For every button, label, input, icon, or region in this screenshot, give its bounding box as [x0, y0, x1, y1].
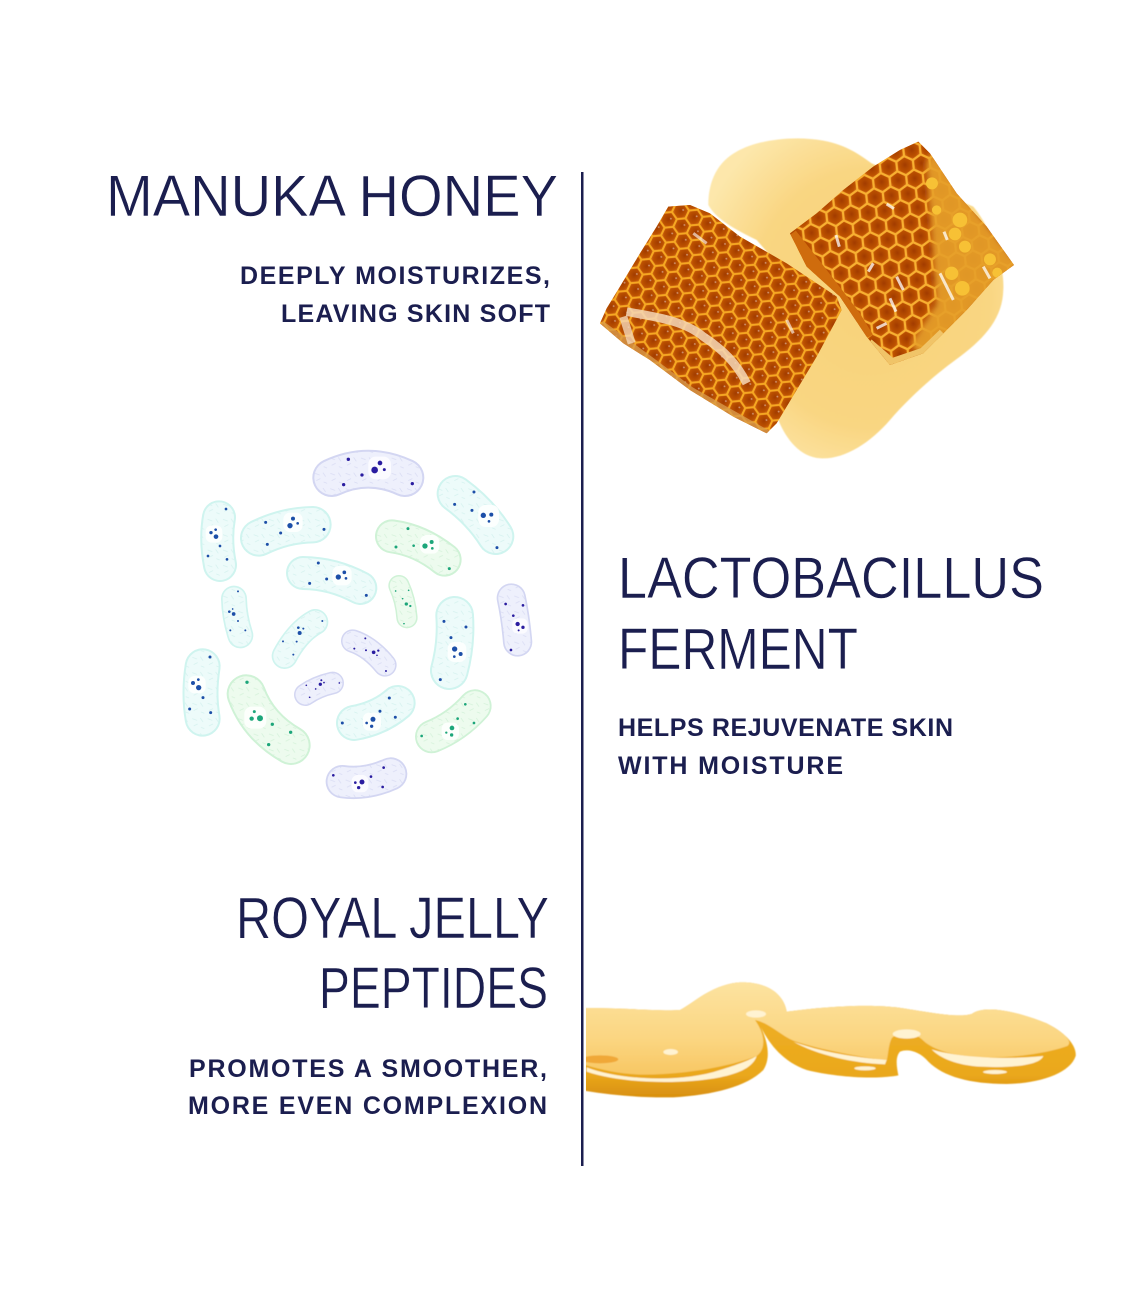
puddle upper surface [580, 982, 1069, 1075]
left honeycomb [600, 205, 842, 434]
description: manuka honey [240, 262, 550, 328]
illustration: honeycomb pieces on honey [590, 130, 1023, 458]
heading: lactobacillus ferment [618, 546, 1044, 682]
description: royal jelly peptides: MORE EVEN COMPLEXION [188, 1092, 547, 1120]
description: royal jelly peptides: PROMOTES A SMOOTHER, [189, 1055, 547, 1083]
bacterium teal right [439, 615, 467, 681]
heading: royal jelly peptides: ROYAL JELLY [236, 886, 549, 951]
puddle body [580, 982, 1076, 1097]
heading: lactobacillus ferment: FERMENT [618, 617, 858, 682]
bacterium teal upper [259, 513, 325, 546]
right honeycomb [790, 142, 1014, 365]
bacterium lavender top [332, 457, 414, 486]
heading: lactobacillus ferment: LACTOBACILLUS [618, 546, 1044, 611]
heading: royal jelly peptides [236, 886, 549, 1021]
bacterium teal lower centre [341, 696, 398, 731]
bacterium lavender right [504, 598, 528, 651]
panel: lactobacillus ferment text [618, 546, 1044, 780]
bacterium green upper right [392, 527, 451, 570]
bacterium green small [395, 586, 411, 624]
puddle rim [580, 982, 1076, 1097]
bacterium teal inner left [282, 620, 323, 656]
bacterium lavender bottom [332, 766, 391, 792]
panel: royal jelly peptides text [188, 886, 549, 1120]
honey pool [708, 138, 1003, 458]
bacterium teal left upper [206, 508, 228, 565]
centre divider line [581, 172, 584, 1166]
description: lactobacillus ferment [618, 714, 953, 780]
illustration: lactobacillus bacteria cluster [188, 457, 528, 792]
heading: manuka honey: MANUKA HONEY [106, 164, 558, 229]
description: manuka honey: DEEPLY MOISTURIZES, [240, 262, 550, 290]
description: manuka honey: LEAVING SKIN SOFT [281, 300, 550, 328]
bacterium teal small left [228, 590, 246, 635]
bacterium lavender inner [353, 637, 387, 672]
heading: royal jelly peptides: PEPTIDES [319, 956, 548, 1021]
puddle orange stain [582, 1055, 618, 1063]
puddle highlights [587, 1010, 1043, 1082]
description: royal jelly peptides [188, 1055, 547, 1120]
panel: manuka honey text [106, 164, 558, 328]
description: lactobacillus ferment: WITH MOISTURE [618, 752, 843, 780]
bacterium teal centre [303, 561, 368, 597]
description: lactobacillus ferment: HELPS REJUVENATE SKIN [618, 714, 953, 742]
bacterium teal top right [453, 490, 499, 549]
bacterium green large [244, 681, 292, 746]
bacterium teal far left [188, 655, 212, 719]
bacterium green lower right [420, 703, 475, 740]
bacterium lavender small [305, 679, 340, 698]
illustration: royal jelly puddle [586, 982, 1077, 1098]
